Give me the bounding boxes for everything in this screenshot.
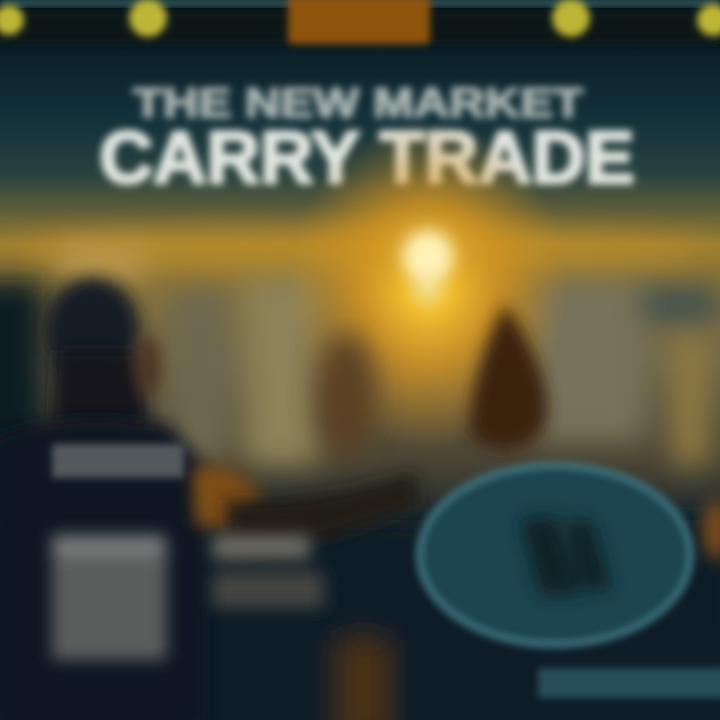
- title: [100, 79, 634, 199]
- text block: lower jacket panel: [52, 535, 167, 660]
- silhouette: distant figure left: [316, 333, 376, 457]
- head: [44, 278, 140, 382]
- text block: upper jacket panel: [52, 444, 184, 478]
- torso: [0, 418, 205, 720]
- icon: yellow lights: [0, 0, 720, 37]
- text block: side panel: [212, 535, 324, 608]
- icon: dark symbol: [520, 515, 612, 595]
- banner badge: orange: [288, 0, 430, 44]
- foreground dark ground: [0, 520, 720, 720]
- title: THE NEW MARKET: [133, 79, 583, 126]
- arm: orange sleeve: [192, 466, 262, 530]
- left vignette: [0, 280, 45, 720]
- footer bar: [538, 668, 720, 698]
- arm: extended: [225, 472, 420, 560]
- title: CARRY TRADE: [100, 116, 634, 199]
- neck and back of head: [50, 350, 150, 430]
- city skyline: [60, 248, 720, 465]
- person: foreground figure: [0, 278, 420, 720]
- top banner: [0, 0, 720, 44]
- silhouette: distant figure right: [470, 305, 547, 449]
- callout: teal circle: [419, 465, 691, 645]
- arm: right edge: [703, 500, 720, 560]
- sun: [20, 120, 700, 450]
